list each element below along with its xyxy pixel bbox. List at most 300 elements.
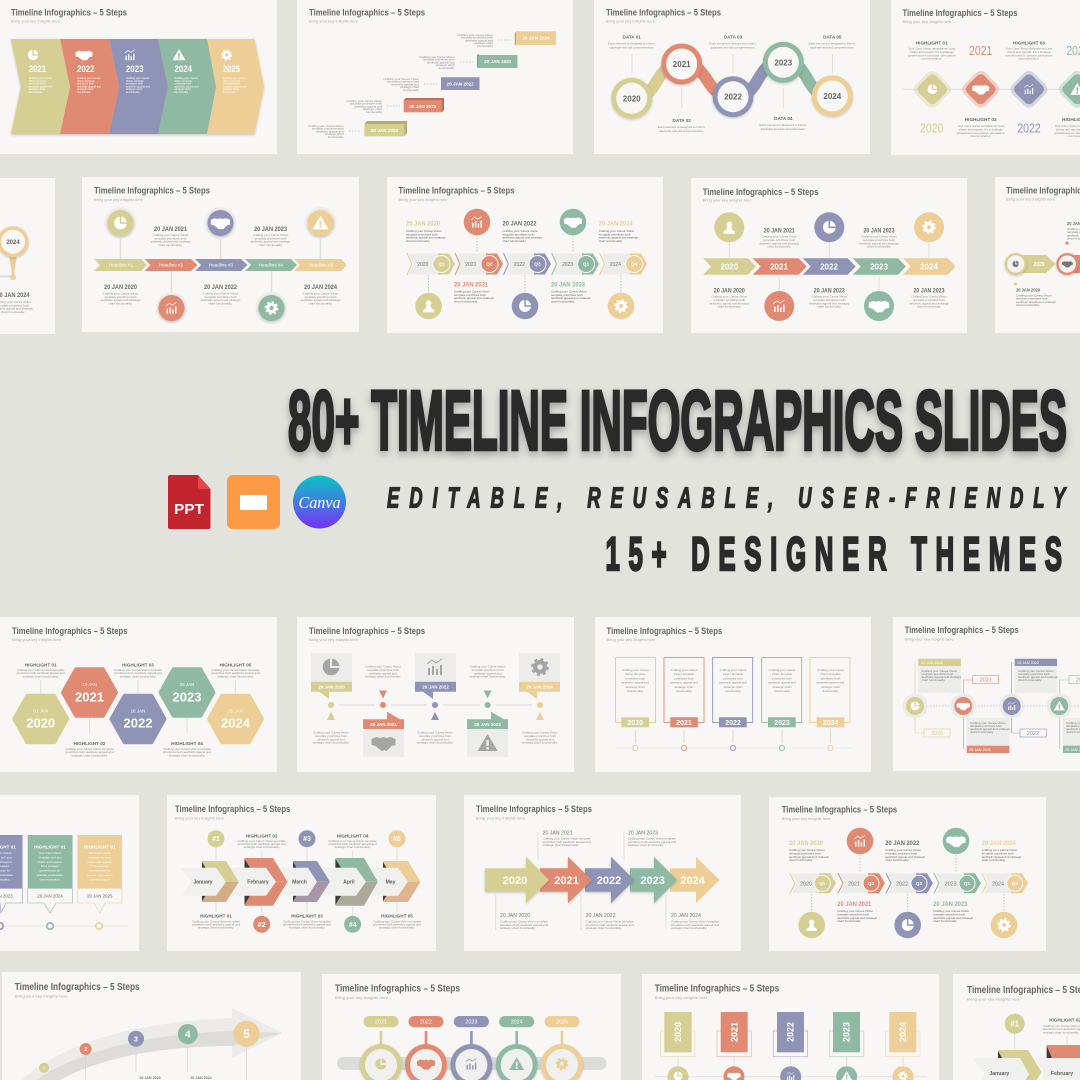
subtitle: Bring your key insights here <box>476 816 525 820</box>
date texts: template prioritizes both <box>913 298 945 302</box>
date texts: 20 JAN 2023 <box>254 227 288 233</box>
number circles: #5 <box>393 836 401 843</box>
year cards: 2020 <box>673 1022 683 1042</box>
date labels: 20 JAN 2023 <box>139 1076 161 1080</box>
chevron body text: prioritizes both <box>126 82 143 86</box>
subtitle: Bring your key insights here <box>606 20 655 24</box>
arrow band: Headline #4 <box>259 263 284 268</box>
date texts: template prioritizes both <box>837 912 869 916</box>
card text <box>621 668 845 693</box>
date texts: Crafting your Canva Vision <box>1016 294 1052 298</box>
date texts: aesthetic appeal and strategic <box>933 916 974 920</box>
highlight labels: strategic chart functionality. <box>335 845 371 849</box>
card text: Crafting your Canva <box>720 668 747 672</box>
date texts: strategic chart functionality. <box>628 843 664 847</box>
date texts: 20 JAN 2023 <box>551 283 586 289</box>
data labels: DATA 05 <box>823 35 842 40</box>
title: Timeline Infographics – 5 Steps <box>12 626 128 636</box>
chevron body text: Vision template <box>223 79 241 83</box>
date texts: template prioritizes both <box>763 238 796 242</box>
data labels: captivate and aid comprehension. <box>609 46 654 50</box>
date texts: aesthetic appeal and strategic <box>789 855 829 859</box>
icon circles <box>415 209 634 319</box>
year labels: 2020 <box>627 720 643 727</box>
highlight labels: Crafting your Canva Vision template <box>238 839 286 843</box>
card text: prioritizes both <box>821 676 841 680</box>
date texts <box>1016 221 1080 307</box>
date texts: 20 JAN 2024 <box>304 285 338 291</box>
highlight labels: charts and reports. It's a strategic <box>1007 50 1052 54</box>
date texts: Crafting your Canva Vision <box>911 294 947 298</box>
coloured chevrons <box>202 858 421 906</box>
quarter band: Q1 <box>964 881 971 886</box>
chevron body text: strategic chart <box>223 87 239 91</box>
grey text boxes: aesthetic appeal and strategic <box>922 675 962 679</box>
leader lines <box>632 54 832 108</box>
highlight labels: powerhouse for precise, persuasive <box>1005 53 1053 57</box>
pin marker 2024: 2024 <box>6 240 20 246</box>
subtitle: Bring your key insights here <box>967 998 1020 1002</box>
year cards: 2022 <box>786 1022 796 1042</box>
highlight labels: HIGHLIGHT 04 <box>171 741 203 746</box>
date bars: 20 JAN 2020 <box>921 661 943 665</box>
year cards: 2021 <box>729 1022 739 1042</box>
step descriptions: template prioritizes both <box>350 102 382 106</box>
panel: quarter hex slide two <box>769 797 1046 951</box>
date texts: chart functionality. <box>1016 303 1040 307</box>
date texts: aesthetic appeal and strategic <box>551 296 591 300</box>
quarter band: Q3 <box>916 881 923 886</box>
card text: prioritizes both <box>723 676 743 680</box>
numbered steps: 4 <box>185 1030 191 1040</box>
quarter band: Q4 <box>631 262 638 267</box>
date texts: prioritizes both aesthetic appeal and <box>586 923 634 927</box>
number circles: #2 <box>258 922 266 929</box>
date texts: Crafting your Canva Vision <box>551 290 587 294</box>
step descriptions: Crafting your Canva Vision <box>346 99 382 103</box>
date labels: 20 JAN 2024 <box>526 684 553 689</box>
year arrows: 2024 <box>920 262 938 272</box>
date texts <box>709 228 949 309</box>
icon: PPT file <box>168 475 210 529</box>
year cards: 2024 <box>898 1022 908 1042</box>
year labels: 2021 <box>676 720 692 727</box>
grey text boxes: template prioritizes both <box>970 724 1002 728</box>
date texts: Crafting your Canva Vision template <box>500 920 548 924</box>
date texts: chart functionality. <box>159 243 183 247</box>
highlight labels: strategic chart functionality. <box>71 753 108 757</box>
icon: slides app <box>227 475 280 529</box>
descriptions: Crafting your Canva Vision <box>313 730 349 734</box>
year pills: 2024 <box>511 1020 523 1026</box>
date texts: template prioritizes both <box>502 232 535 236</box>
curved arrow <box>22 1008 282 1080</box>
card text: Vision template <box>820 672 841 676</box>
date texts: chart functionality. <box>885 858 909 862</box>
card text: aesthetic appeal and <box>670 681 698 685</box>
date texts: chart functionality. <box>551 299 575 303</box>
descriptions: template prioritizes both <box>419 734 451 738</box>
month labels: January <box>989 1071 1009 1077</box>
date texts: aesthetic appeal and strategic <box>151 240 191 244</box>
highlight labels: HIGHLIGHT 01 <box>200 914 232 919</box>
month labels: January <box>193 880 213 886</box>
highlight labels: HIGHLIGHT 03 <box>1013 40 1045 45</box>
date texts: template prioritizes both <box>551 293 583 297</box>
date texts: template prioritizes both <box>305 295 337 299</box>
connected circles chart: 2023 <box>774 58 793 67</box>
month labels: February <box>1051 1071 1073 1077</box>
hexagons: 01 JAN <box>33 708 48 713</box>
tagline: EDITABLE, REUSABLE, USER-FRIENDLY <box>387 482 1068 515</box>
date texts: Crafting your Canva Vision <box>303 292 339 296</box>
panel: quarter hex slide <box>387 177 663 333</box>
date texts: Crafting your Canva Vision <box>982 848 1018 852</box>
grey text boxes: Crafting your Canva Vision <box>922 669 957 673</box>
connected circles chart: 2022 <box>724 93 742 102</box>
title: Timeline Infographics – 5 Steps <box>309 8 425 18</box>
highlight labels: prioritizes both aesthetic appeal and <box>163 750 211 754</box>
card text: Crafting your Canva <box>622 668 649 672</box>
chevron body text: aesthetic appeal and <box>223 84 247 88</box>
highlight labels: charts and reports. It's a strategic <box>910 50 954 54</box>
date texts: 20 JAN 2023 <box>914 288 945 294</box>
title: Timeline Infographics – 5 Steps <box>606 8 721 18</box>
highlight labels: Your Canv Vision template isn't just <box>908 46 955 50</box>
date texts: Crafting your Canva Vision <box>599 229 635 233</box>
quarter band: 2020 <box>417 262 429 268</box>
highlight labels: charts and reports. It's a strategic <box>959 127 1003 131</box>
date labels: 20 JAN 2021 <box>370 722 397 727</box>
subtitle: Bring your key insights here <box>309 20 358 24</box>
card text: aesthetic appeal and <box>817 681 845 685</box>
highlight labels: strategic chart functionality. <box>198 926 234 930</box>
year pills: 2023 <box>465 1020 477 1026</box>
dotted leaders <box>429 235 621 293</box>
year arrows: 2022 <box>820 262 838 272</box>
date texts: template prioritizes both <box>155 236 187 240</box>
big arrows: 2022 <box>597 875 621 887</box>
date labels: 20 JAN 2023 <box>474 722 501 727</box>
number circles <box>208 830 406 933</box>
date texts: 20 JAN 2023 <box>628 830 658 836</box>
card text: functionality <box>676 689 692 693</box>
date texts: chart functionality. <box>309 301 333 305</box>
descriptions: template prioritizes both <box>524 734 556 738</box>
card text: strategic chart <box>821 685 840 689</box>
icon circles <box>902 694 1072 718</box>
years: 2025 <box>223 64 240 74</box>
highlight labels: HIGHLIGHT 05 <box>220 662 252 667</box>
column text: charts and reports. <box>87 860 112 864</box>
date texts: chart functionality. <box>867 245 891 249</box>
step descriptions: Crafting your Canva Vision <box>383 77 419 81</box>
big arrows <box>485 857 720 903</box>
step descriptions: aesthetic appeal and <box>316 129 344 133</box>
leader lines <box>729 243 929 291</box>
pin circles <box>104 207 336 324</box>
hexagons: 2020 <box>26 715 55 730</box>
hexagons: 2024 <box>221 715 251 730</box>
date texts: Crafting your Canva Vision <box>885 848 921 852</box>
subtitle: Bring your key insights here <box>94 198 143 202</box>
date and text <box>0 293 33 314</box>
date boxes: 20 JAN 2020 <box>371 128 398 133</box>
highlight labels: Your Canv Vision template isn't just <box>1006 46 1053 50</box>
date texts: chart functionality. <box>109 301 133 305</box>
hexagons: 2023 <box>173 689 201 704</box>
descriptions: strategic chart functionality. <box>417 741 453 745</box>
data labels: captivate and aid comprehension. <box>810 46 855 50</box>
years: 2021 <box>29 64 46 74</box>
year labels: 2024 <box>823 720 838 727</box>
chevron body text: functionality <box>174 90 189 94</box>
data labels: DATA 02 <box>673 118 691 123</box>
highlight labels: communication. <box>921 57 942 61</box>
date texts: aesthetic appeal and strategic <box>251 240 291 244</box>
descriptions: Crafting your Canva Vision <box>365 664 401 668</box>
date texts: Crafting your Canva Vision <box>153 233 189 237</box>
date texts: template prioritizes both <box>406 232 438 236</box>
chevron body text: prioritizes both <box>223 82 240 86</box>
outlined year boxes <box>924 676 1080 737</box>
step descriptions: strategic chart <box>363 107 382 111</box>
date texts: Crafting your Canva Vision <box>203 292 239 296</box>
grey text boxes: chart functionality. <box>1018 678 1042 682</box>
descriptions: aesthetic appeal and <box>421 737 449 741</box>
data labels: captivate and aid comprehension. <box>659 129 704 133</box>
data labels: DATA 04 <box>774 116 793 121</box>
highlight labels: prioritizes both aesthetic appeal and <box>211 671 260 675</box>
date labels: 20 JAN 2022 <box>422 684 449 689</box>
date texts: chart functionality. <box>982 858 1006 862</box>
chevron body text: strategic chart <box>174 87 191 91</box>
number circle: #1 <box>1010 1020 1020 1029</box>
step descriptions: strategic chart <box>474 41 493 45</box>
date texts: Crafting your Canva Vision <box>406 229 442 233</box>
descriptions: Crafting your Canva Vision <box>417 730 453 734</box>
highlight labels: HIGHLIGHT 03 <box>291 914 323 919</box>
card text: functionality <box>774 689 790 693</box>
date texts: template prioritizes both <box>713 298 746 302</box>
highlight labels: HIGHLIGHT 02 <box>246 833 278 838</box>
hexagons: 25 JAN <box>228 708 243 713</box>
year labels: 2022 <box>1017 122 1041 136</box>
grey month arrows <box>180 868 408 896</box>
hexagons: 26 JAN <box>180 682 194 687</box>
date texts: strategic chart functionality. <box>543 843 579 847</box>
descriptions: template prioritizes both <box>472 668 504 672</box>
card text: strategic chart <box>626 685 645 689</box>
highlight text: strategic chart functionality. <box>1043 1030 1079 1034</box>
highlight labels: Crafting your Canva Vision template <box>283 920 331 924</box>
chevron body text: aesthetic appeal and <box>77 84 101 88</box>
big arrows: 2023 <box>640 875 665 887</box>
subtitle: Bring your key insights here <box>11 20 60 24</box>
column text: 20 JAN 2025 <box>87 894 113 898</box>
arrows and rings <box>1005 241 1080 286</box>
date texts: aesthetic appeal and strategic <box>101 298 141 302</box>
connected circles chart <box>611 42 853 119</box>
descriptions: Crafting your Canva Vision <box>470 664 506 668</box>
date texts: template prioritizes both <box>599 232 631 236</box>
date boxes: 20 JAN 2024 <box>522 36 550 41</box>
diamonds <box>911 68 1080 111</box>
highlight labels: communication. <box>1018 57 1040 61</box>
date texts: Crafting your Canva Vision template <box>586 920 634 924</box>
highlight labels: prioritizes both aesthetic appeal and <box>373 922 421 926</box>
panel: vertical year cards slide <box>642 974 939 1080</box>
title: Timeline Infographics – 5 Steps <box>398 186 514 196</box>
date labels: 20 JAN 2020 <box>318 684 345 689</box>
leader lines <box>41 680 236 733</box>
panel: month chevrons slide at right edge <box>953 974 1080 1080</box>
outlined cards <box>616 658 850 722</box>
highlight labels: strategic chart functionality. <box>244 845 280 849</box>
highlight labels: prioritizes both aesthetic appeal and <box>114 671 162 675</box>
subtitle: Bring your key insights here <box>606 638 656 642</box>
date texts: Crafting your Canva Vision template <box>671 920 719 924</box>
date texts: 20 JAN 2023 <box>814 288 845 294</box>
card text: Crafting your Canva <box>671 668 698 672</box>
highlight labels: powerhouse for precise, persuasive <box>957 131 1005 135</box>
step descriptions: functionality <box>439 66 455 70</box>
year labels: 2023 <box>774 720 790 727</box>
highlight labels: HIGHLIGHT 02 <box>74 741 106 746</box>
quarter band <box>790 873 1028 893</box>
date texts: Crafting your Canva Vision <box>761 234 797 238</box>
quarter band: 2024 <box>610 262 621 268</box>
subtitle: Bring your key insights here <box>655 996 708 1000</box>
highlight labels: Crafting your Canva Vision template <box>163 747 211 751</box>
hexagons: 2022 <box>124 715 152 730</box>
panel: month chevrons slide <box>167 795 436 951</box>
chevron body text: Crafting your Canva <box>126 76 150 80</box>
descriptions: Crafting your Canva Vision <box>522 730 558 734</box>
column text <box>0 844 116 898</box>
card text: aesthetic appeal and <box>621 681 649 685</box>
date texts: prioritizes both aesthetic appeal and <box>543 840 591 844</box>
date texts: aesthetic appeal and strategic <box>885 855 926 859</box>
date texts: strategic chart functionality. <box>500 926 536 930</box>
year labels: 2022 <box>725 720 741 727</box>
card text: Vision template <box>625 672 646 676</box>
panel: headline arrows with pins slide <box>82 177 359 332</box>
card text: Vision template <box>772 672 793 676</box>
date texts: template prioritizes both <box>1016 297 1048 301</box>
year pills: 2021 <box>375 1020 387 1026</box>
panel: callout columns slide at left edge <box>0 795 139 951</box>
highlight labels: prioritizes both aesthetic appeal and <box>65 750 114 754</box>
year pills: 2022 <box>420 1020 432 1026</box>
descriptions: template prioritizes both <box>315 734 347 738</box>
date texts: chart functionality. <box>767 245 791 249</box>
hexagons: 13 JAN <box>82 682 97 687</box>
step descriptions <box>308 33 493 139</box>
highlight labels: strategic chart functionality. <box>169 753 205 757</box>
date texts: chart functionality. <box>599 239 623 243</box>
subtitle: Bring your key insights here <box>12 638 61 642</box>
step leaders <box>86 1044 246 1080</box>
date texts: 20 JAN 2022 <box>502 222 537 228</box>
arrow band: Headline #3 <box>209 263 234 268</box>
quarter band: Q1 <box>438 262 445 267</box>
panel: hexagons slide <box>0 617 277 772</box>
highlight labels: powerhouse for precise, persuasive <box>908 53 956 57</box>
highlight labels: strategic chart functionality. <box>23 674 59 678</box>
arrow band: Headline #5 <box>309 263 334 268</box>
chevron body text: aesthetic appeal and <box>29 84 53 88</box>
month labels: April <box>343 880 355 886</box>
title: Timeline Infographics – 5 Steps <box>94 186 210 196</box>
date texts: chart functionality. <box>502 239 527 243</box>
date texts: aesthetic appeal and strategic <box>709 301 750 305</box>
column text: It's a strategic <box>41 864 60 868</box>
date texts: 20 JAN 2022 <box>885 841 920 847</box>
card text: functionality <box>823 689 839 693</box>
date labels: 20 JAN 2024 <box>190 1076 212 1080</box>
date texts: template prioritizes both <box>789 851 821 855</box>
date texts: 20 JAN 2020 <box>1016 288 1041 293</box>
highlight labels: HIGHLIGHT 01 <box>25 662 57 667</box>
year arrows: 2021 <box>770 262 788 272</box>
highlight labels: Crafting your Canva Vision template <box>114 668 162 672</box>
date texts: chart functionality. <box>406 239 430 243</box>
highlight labels <box>908 40 1080 138</box>
step descriptions: aesthetic appeal and <box>427 60 455 64</box>
date texts: aesthetic appeal and strategic <box>301 298 341 302</box>
date texts: 20 JAN 2022 <box>586 913 616 919</box>
date texts: 20 JAN 2024 <box>671 913 701 919</box>
date texts: template prioritizes both <box>885 851 917 855</box>
connected circles chart: 2024 <box>823 92 842 101</box>
date texts: 20 JAN 2020 <box>714 288 745 294</box>
date texts: strategic chart functionality. <box>586 926 622 930</box>
panel: overlapping arrows slide <box>464 795 741 951</box>
highlight labels: prioritizes both aesthetic appeal and <box>329 842 377 846</box>
column text: communication. <box>39 877 61 881</box>
grey text boxes: template prioritizes both <box>1018 672 1050 676</box>
arrow band: Headline #1 <box>109 263 134 268</box>
title: Timeline Infographics – 5 Steps <box>476 804 592 814</box>
date texts: 20 JAN 2020 <box>789 841 824 847</box>
title: Timeline Infographics – 5 Steps <box>309 626 425 636</box>
subtitle: Bring your key insights here <box>703 198 752 202</box>
step descriptions: functionality <box>403 88 419 92</box>
big arrows: 2021 <box>554 875 579 887</box>
data labels: Each element is designed to inform, <box>759 123 807 127</box>
step descriptions: Crafting your Canva Vision <box>308 124 344 128</box>
date and text: chart functionality. <box>1 310 25 314</box>
chevron body text: Vision template <box>29 79 47 83</box>
quarter band: 2021 <box>465 262 477 268</box>
panel: callout squares slide <box>297 617 574 772</box>
outlined year labels: 2022 <box>1027 731 1039 737</box>
date texts: Crafting your Canva Vision <box>837 909 873 913</box>
title: Timeline Infographics – 5 Steps <box>335 984 460 995</box>
quarter band: 2021 <box>848 881 860 887</box>
grey text boxes: template prioritizes both <box>922 672 954 676</box>
chevron band <box>11 39 264 134</box>
grey text boxes: aesthetic appeal and strategic <box>970 727 1010 731</box>
subtitle: Bring your key insights here <box>1006 198 1055 202</box>
date texts: aesthetic appeal and strategic <box>599 236 639 240</box>
numbered steps: 3 <box>134 1036 138 1043</box>
date texts: template prioritizes both <box>105 295 137 299</box>
quarter band: Q2 <box>486 262 493 267</box>
date texts <box>406 222 639 303</box>
column text: Your Canv Vision <box>39 851 62 855</box>
